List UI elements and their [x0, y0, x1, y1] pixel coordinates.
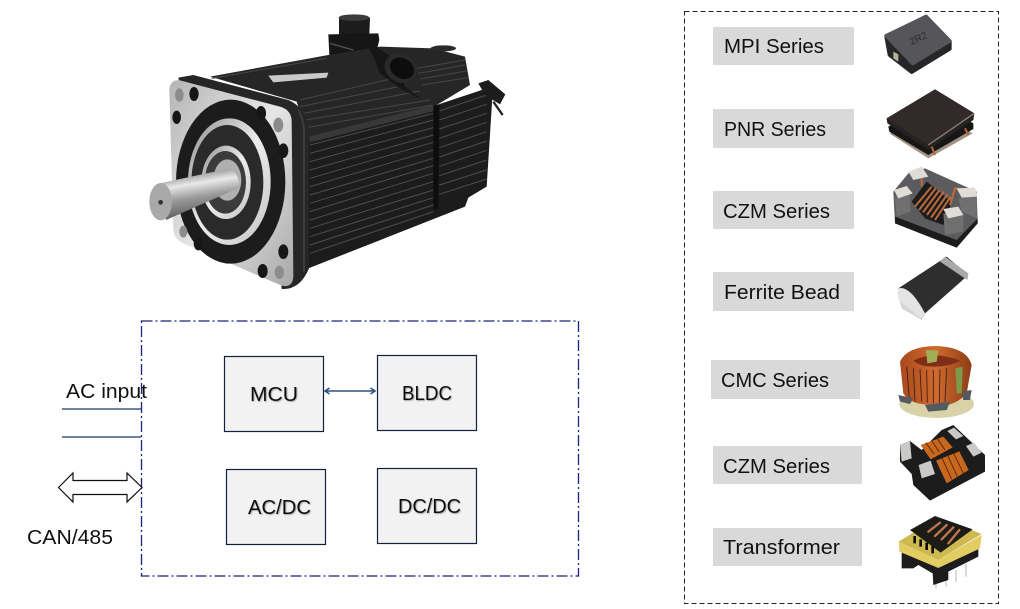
MCU block: [224, 356, 324, 432]
motor mounting holes: [172, 87, 288, 279]
motor side cable port: [367, 41, 423, 100]
label: MPI Series: [713, 27, 854, 65]
BLDC block: [378, 356, 476, 430]
MCU to BLDC arrow: [325, 388, 375, 394]
MCU block: MCU: [250, 384, 298, 406]
motor flange face: [169, 80, 293, 286]
icon: transformer: [899, 516, 982, 588]
icon: CMC toroid: [898, 346, 974, 418]
label: MPI Series: MPI Series: [724, 35, 824, 58]
icon: MPI inductor: [886, 16, 950, 72]
icon: CZM common mode choke: [893, 167, 978, 248]
label: Transformer: Transformer: [723, 536, 840, 559]
label: CZM Series second: CZM Series: [723, 455, 830, 478]
label: PNR Series: PNR Series: [724, 118, 826, 141]
label: Ferrite Bead: [713, 272, 854, 311]
icon: MPI inductor: 2R2: [908, 30, 930, 48]
dashed enclosure: [684, 12, 998, 604]
AC/DC block: [226, 470, 326, 544]
motor illustration: [149, 14, 505, 289]
motor flange rings: [176, 100, 285, 264]
AC/DC block: AC/DC: [248, 497, 311, 519]
icon: PNR inductor: [887, 89, 974, 158]
AC input lines: [62, 409, 141, 437]
icon: CZM choke second: [900, 425, 985, 501]
label: Ferrite Bead: Ferrite Bead: [724, 281, 840, 304]
label: PNR Series: [713, 109, 854, 148]
motor top face: [210, 47, 470, 138]
icon: ferrite bead: [897, 257, 968, 320]
label: Transformer: [713, 528, 862, 566]
motor shaft: [149, 168, 239, 220]
motor rear connector: [431, 45, 505, 115]
label: CZM Series: CZM Series: [723, 200, 830, 223]
DC/DC block: DC/DC: [398, 496, 461, 518]
BLDC block: BLDC: [402, 383, 452, 405]
motor side fins: [308, 88, 493, 268]
panel: inductor series list: [684, 12, 998, 604]
label: CMC Series: CMC Series: [721, 369, 829, 392]
CAN/485 label: CAN/485: [27, 527, 113, 549]
AC input label: AC input: [66, 381, 147, 403]
panel: motor block diagram: [27, 321, 578, 576]
label: CMC Series: [711, 360, 860, 399]
motor top connector: [328, 14, 379, 73]
CAN/485 double arrow: [58, 473, 142, 502]
label: CZM Series second: [713, 446, 862, 484]
label: CZM Series: [713, 191, 854, 229]
motor flange side: [178, 75, 309, 289]
DC/DC block: [378, 468, 476, 544]
dash-dot enclosure: [142, 321, 578, 576]
